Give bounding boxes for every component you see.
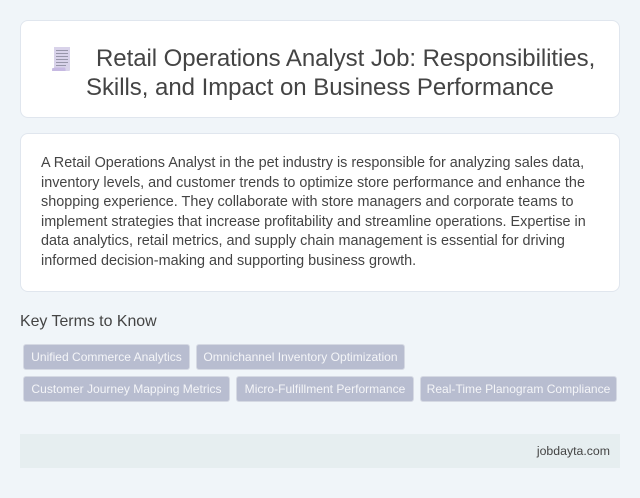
description text: inventory levels, and customer trends to optimize store performance and enhance the — [41, 175, 585, 191]
footer bar — [20, 434, 620, 468]
description text: data analytics, retail metrics, and supply chain management is essential for driving — [41, 233, 565, 249]
tag: Real-Time Planogram Compliance — [427, 382, 610, 396]
title line 1: Retail Operations Analyst Job: Responsibilities, — [96, 45, 595, 72]
heading: key terms: Key Terms to Know — [20, 313, 157, 330]
tag: Micro-Fulfillment Performance — [245, 382, 405, 396]
tag: Omnichannel Inventory Optimization — [203, 350, 398, 364]
footer source text: jobdayta.com — [537, 444, 610, 458]
description text: informed decision-making and supporting business growth. — [41, 253, 416, 269]
title line 2: Skills, and Impact on Business Performance — [86, 74, 554, 101]
icon: document receipt — [52, 47, 70, 71]
description text: shopping experience. They collaborate with store managers and corporate teams to — [41, 194, 574, 210]
tag group: key terms — [23, 344, 617, 402]
panel: description card — [20, 133, 620, 292]
description text: A Retail Operations Analyst in the pet industry is responsible for analyzing sales data, — [41, 155, 584, 171]
panel: title card — [20, 20, 620, 118]
tag — [23, 376, 230, 402]
description text: implement strategies that increase profitability and streamline operations. Expertise in — [41, 214, 586, 230]
tag — [420, 376, 617, 402]
tag — [236, 376, 414, 402]
tag — [23, 344, 190, 370]
tag — [196, 344, 405, 370]
description text — [41, 155, 586, 269]
tag: Unified Commerce Analytics — [31, 350, 182, 364]
tag: Customer Journey Mapping Metrics — [31, 382, 222, 396]
